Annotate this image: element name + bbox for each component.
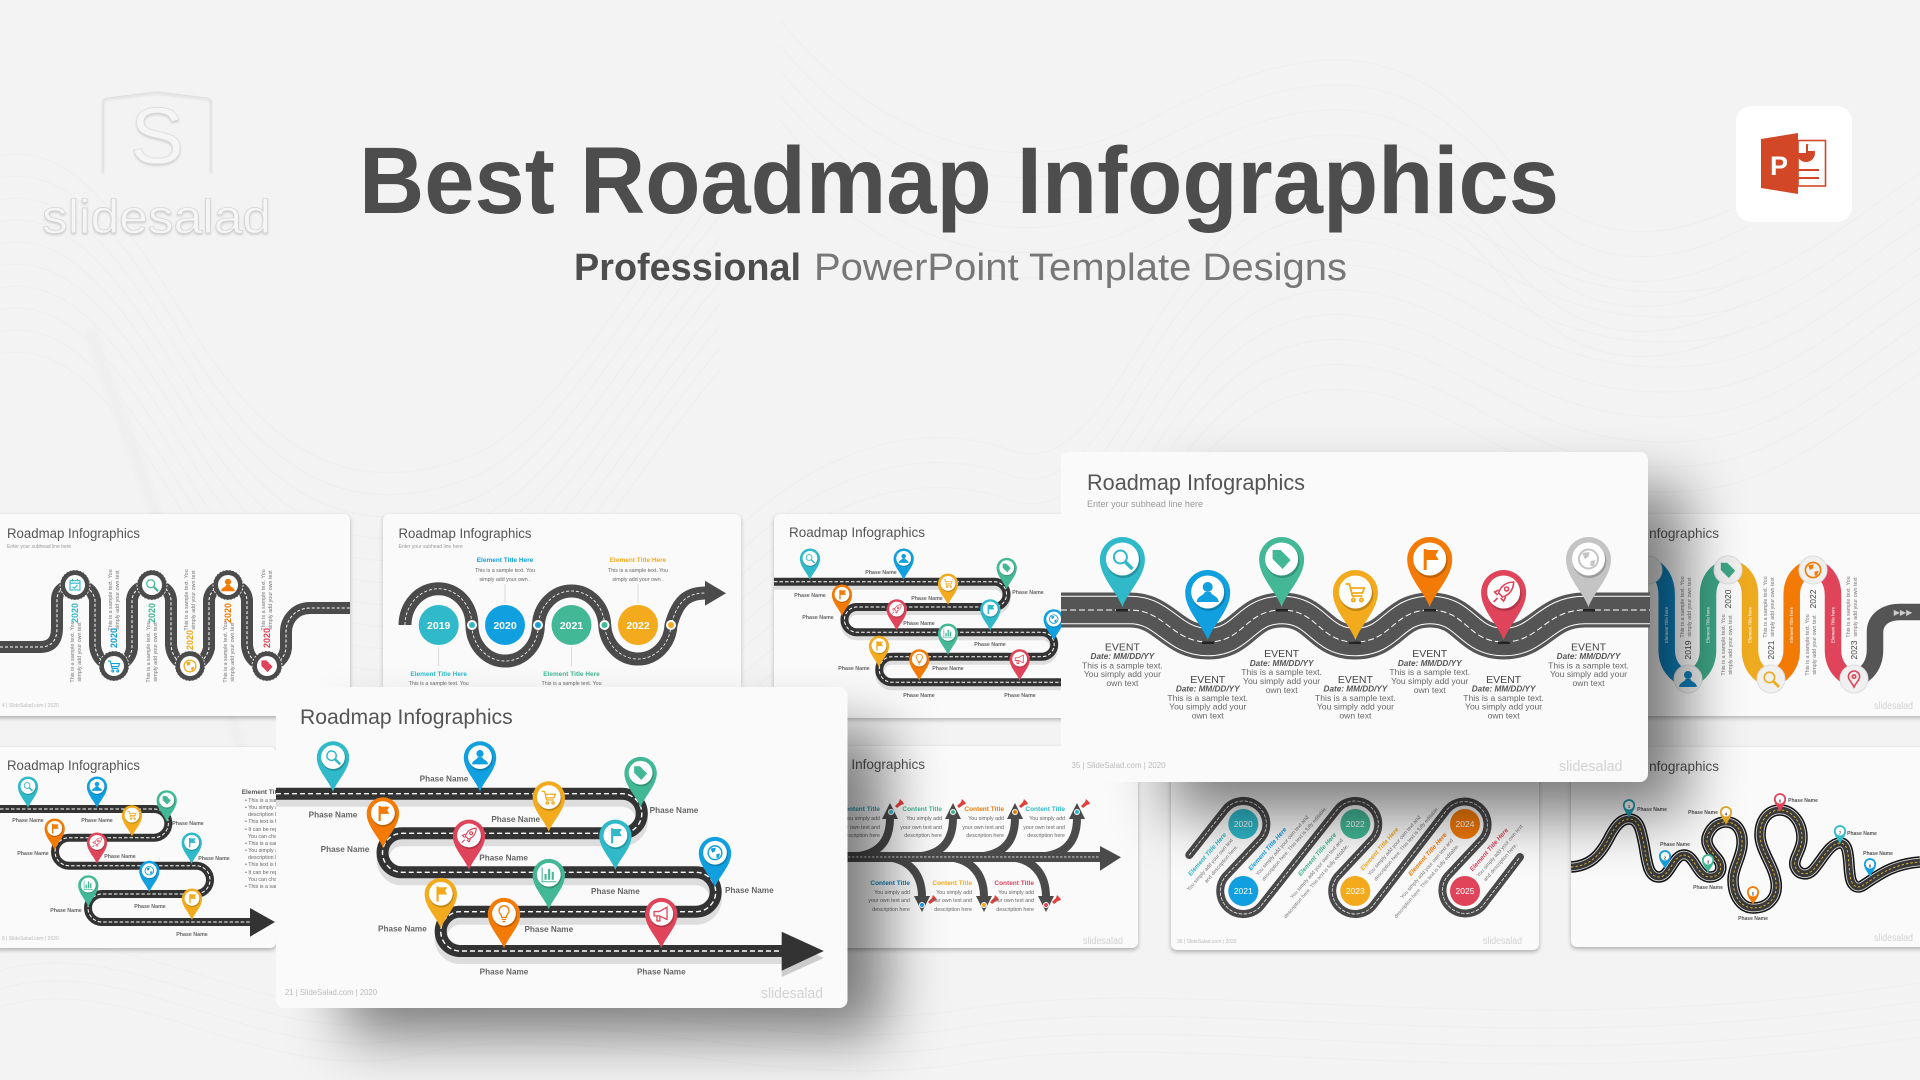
event text 5: You simply add your <box>1391 676 1468 686</box>
panel: slide G diagonal road: description here. This text is fully editable. <box>1283 843 1351 920</box>
panel: slide F fishbone road: Content Title <box>1025 806 1065 813</box>
panel: slide F fishbone road: Roadmap Infographics <box>789 757 925 772</box>
panel: slide D ribbon road with years: simply add your own text <box>1728 615 1734 675</box>
panel: slide G diagonal road: You simply add your own text and <box>1255 815 1310 877</box>
panel: slide E stacked road with arrow: Phase Name <box>176 932 208 938</box>
panel: slide F fishbone road: You simply add <box>998 890 1034 896</box>
panel: slide H winding road with numbered pins: Phase Name <box>1660 842 1690 848</box>
pin: cart <box>1333 570 1378 640</box>
panel: slide A vertical zigzag road: Enter your subhead line here <box>7 544 71 550</box>
panel: slide E stacked road with arrow: • You simply add <box>245 805 284 811</box>
event text 7: Date: MM/DD/YY <box>1557 652 1622 661</box>
event text 4: This is a sample text. <box>1315 693 1396 703</box>
pin: orange flag <box>367 797 399 848</box>
panel: slide D ribbon road with years: 2022 <box>1808 589 1818 608</box>
panel: slide F fishbone road: You simply add <box>906 816 942 822</box>
panel: slide H winding road with numbered pins: 6 <box>1779 798 1782 804</box>
panel: slide A vertical zigzag road: simply add your own text <box>191 570 197 630</box>
panel: slide H winding road with numbered pins: Phase Name <box>1637 807 1667 813</box>
panel: slide G diagonal road: 2020 <box>1234 819 1253 829</box>
panel: slide G diagonal road: You simply add your own text and <box>1367 815 1422 877</box>
panel: slide F fishbone road: You simply add <box>968 816 1004 822</box>
panel: slide D ribbon road with years: This is a sample text. You <box>1805 614 1811 676</box>
panel: slide A vertical zigzag road: 2020 <box>262 628 272 648</box>
event text 1: Date: MM/DD/YY <box>1091 652 1156 661</box>
event text 2: EVENT <box>1190 674 1226 686</box>
pin: chart <box>533 859 565 909</box>
panel: slide A vertical zigzag road: 2020 <box>185 630 195 650</box>
panel: slide F fishbone road: description here <box>966 833 1004 839</box>
panel: slide F fishbone road: description here <box>872 907 910 913</box>
event text 2: You simply add your <box>1169 702 1246 712</box>
event text 5: EVENT <box>1412 648 1448 660</box>
panel: slide H winding road with numbered pins: 8 <box>1869 864 1872 868</box>
event text 3: You simply add your <box>1243 676 1320 686</box>
pin: rocket <box>1481 570 1526 640</box>
panel: slide F fishbone road: You simply add <box>844 816 880 822</box>
panel: slide F fishbone road: your own text and <box>838 825 880 831</box>
pin: bulb <box>488 898 520 948</box>
slide watermark: slidesalad <box>1559 758 1622 775</box>
panel: slide D ribbon road with years: ▶▶▶ <box>1894 608 1913 617</box>
panel: slide D ribbon road with years: This is a sample text. You <box>1846 576 1852 638</box>
logo: embossed slidesalad: slidesalad <box>42 190 271 243</box>
pin: yellow flag <box>425 878 457 928</box>
panel: slide B sine-wave road with year circles: simply add your own . <box>612 577 664 583</box>
pin: search <box>317 741 349 792</box>
panel: slide B sine-wave road with year circles: This is a sample text. You <box>608 568 668 574</box>
event text 1: EVENT <box>1105 642 1140 654</box>
panel: slide F fishbone road: description here <box>996 907 1034 913</box>
phase labels: Phase Name <box>637 968 686 976</box>
panel: slide B sine-wave road with year circles: Element Title Here <box>477 557 534 564</box>
panel: slide E stacked road with arrow: Element Title <box>242 789 282 796</box>
event text 1: own text <box>1106 678 1139 688</box>
event text 3 <box>1241 648 1322 695</box>
panel: slide E stacked road with arrow: description here <box>248 812 286 818</box>
panel: slide G diagonal road: Element Title Here <box>1469 827 1510 873</box>
panel: slide H winding road with numbered pins: 7 <box>1839 830 1842 836</box>
panel: slide A vertical zigzag road: Roadmap Infographics <box>7 526 140 541</box>
panel: slide A vertical zigzag road: This is a sample text. You <box>70 621 76 683</box>
panel: featured slide, stacked road with phase pins <box>276 687 848 1008</box>
panel: slide B sine-wave road with year circles: Roadmap Infographics <box>398 526 532 541</box>
panel: slide F fishbone road: Content Title <box>994 880 1034 887</box>
panel: slide B sine-wave road with year circles: Element Title Here <box>543 671 600 678</box>
panel: slide C stacked road with pins: Phase Name <box>903 693 935 699</box>
event text 4: EVENT <box>1338 674 1373 686</box>
phase labels: Phase Name <box>321 845 370 854</box>
slide watermark: slidesalad <box>761 985 823 1002</box>
panel: slide H winding road with numbered pins: Phase Name <box>1693 885 1723 891</box>
event text 2: own text <box>1192 710 1224 720</box>
panel: slide G diagonal road: You simply add your own text and <box>1289 838 1345 900</box>
panel: slide G diagonal road: You simply add your own text <box>1476 824 1525 879</box>
panel: slide A vertical zigzag road: simply add your own text <box>77 622 83 682</box>
phase labels: Phase Name <box>480 968 529 976</box>
subtitle <box>574 247 1347 289</box>
panel: slide D ribbon road with years: simply add your own text <box>1687 577 1693 637</box>
panel: slide G diagonal road: You simply add your own text and <box>1400 838 1455 900</box>
slide footer: 35 | SlideSalad.com | 2020 <box>1072 760 1166 770</box>
panel: slide E stacked road with arrow: • This text is fully <box>245 819 285 825</box>
panel: slide F fishbone road: You simply add <box>1029 816 1065 822</box>
panel: slide G diagonal road: Element Title Here <box>1407 831 1449 878</box>
panel: slide B sine-wave road with year circles: Enter your subhead line here <box>398 544 463 550</box>
panel: slide E stacked road with arrow: Roadmap Infographics <box>7 758 140 773</box>
panel: slide E stacked road with arrow: 8 | SlideSalad.com | 2020 <box>2 936 59 942</box>
panel: slide A vertical zigzag road <box>0 514 350 718</box>
panel: slide B sine-wave road with year circles: 2021 <box>560 620 583 632</box>
panel: slide C stacked road with pins: Phase Name <box>974 642 1006 648</box>
panel: slide C stacked road with pins <box>774 514 1074 720</box>
slide heading: Roadmap Infographics <box>300 705 513 729</box>
slide heading: Roadmap Infographics <box>1087 470 1305 495</box>
panel: slide G diagonal road: 2023 <box>1346 886 1365 896</box>
panel: slide D ribbon road with years: This is a sample text. You <box>1721 614 1727 676</box>
panel: slide F fishbone road: Content Title <box>964 806 1004 813</box>
panel: slide A vertical zigzag road: This is a sample text. You <box>146 621 152 683</box>
panel: slide A vertical zigzag road: 4 | SlideSalad.com | 2020 <box>2 703 59 709</box>
panel: slide F fishbone road: slidesalad <box>1083 936 1123 947</box>
event text 5: own text <box>1414 685 1446 695</box>
panel: slide G diagonal road: Element Title Here <box>1247 826 1289 872</box>
event text 7: This is a sample text. <box>1548 660 1629 670</box>
panel: slide C stacked road with pins: Phase Name <box>1012 590 1044 596</box>
panel: slide H winding road with numbered pins: Phase Name <box>1847 831 1877 837</box>
panel: slide G diagonal road: Element Title Here <box>1359 826 1401 872</box>
event text 5: This is a sample text. <box>1389 667 1470 677</box>
panel: slide F fishbone road: description here <box>934 907 972 913</box>
event text 4: own text <box>1339 710 1372 720</box>
event text 4: You simply add your <box>1317 702 1394 712</box>
panel: slide E stacked road with arrow: You can change <box>248 877 286 883</box>
panel: slide G diagonal road: Element Title Here <box>1187 831 1229 878</box>
panel: slide B sine-wave road with year circles <box>383 514 741 718</box>
panel: slide E stacked road with arrow: Phase Name <box>134 904 166 910</box>
panel: slide H winding road with numbered pins: Phase Name <box>1688 810 1718 816</box>
logo: embossed slidesalad: S <box>130 91 184 180</box>
panel: slide F fishbone road: You simply add <box>936 890 972 896</box>
panel: slide H winding road with numbered pins: 5 <box>1752 892 1755 896</box>
event text 5 <box>1389 648 1470 695</box>
event text 6 <box>1463 674 1544 720</box>
shadow of the featured top slide <box>1170 490 1685 815</box>
panel: slide A vertical zigzag road: This is a sample text. You <box>184 569 190 631</box>
panel: slide E stacked road with arrow: • It can be replaced <box>245 827 290 833</box>
panel: slide E stacked road with arrow: • It can be replaced <box>245 870 290 876</box>
pin: megaphone <box>645 898 678 948</box>
phase labels: Phase Name <box>725 886 774 895</box>
panel: slide A vertical zigzag road: 2020 <box>109 628 119 648</box>
phase labels: Phase Name <box>378 924 427 934</box>
panel: slide E stacked road with arrow: Phase Name <box>198 856 230 862</box>
panel: slide D ribbon road with years: This is a sample text. You <box>1763 576 1769 638</box>
panel: slide H winding road with numbered pins: 1 <box>1628 804 1631 809</box>
pin: search <box>1100 537 1145 607</box>
panel: slide G diagonal road: You simply add your own text <box>1186 837 1235 893</box>
panel: slide D ribbon road with years: simply add your own text <box>1853 577 1859 637</box>
title: Best Roadmap Infographics <box>359 128 1559 234</box>
panel: slide D ribbon road with years: Element Title here <box>1748 606 1752 643</box>
event text 2: Date: MM/DD/YY <box>1176 684 1241 694</box>
panel: slide D ribbon road with years: This is a sample text. You <box>1680 576 1686 638</box>
panel: slide G diagonal road: 2025 <box>1456 886 1475 896</box>
panel: slide G diagonal road: 2022 <box>1346 819 1365 829</box>
pin: flag <box>1407 537 1452 607</box>
panel: slide G diagonal road: 2024 <box>1456 819 1475 829</box>
panel: slide B sine-wave road with year circles: Element Title Here <box>610 557 667 564</box>
phase labels: Phase Name <box>420 774 469 784</box>
panel: slide G diagonal road: description here. This text is fully editable. <box>1261 806 1329 882</box>
panel: slide F fishbone road: your own text and <box>992 898 1034 904</box>
phase labels: Phase Name <box>524 925 574 934</box>
panel: slide E stacked road with arrow: Phase Name <box>50 908 82 914</box>
panel: slide D ribbon road with years: simply add your own text <box>1812 615 1818 675</box>
panel: slide A vertical zigzag road: simply add your own text <box>153 622 159 682</box>
panel: slide E stacked road with arrow: description here <box>248 855 286 861</box>
panel: slide H winding road with numbered pins: Phase Name <box>1738 916 1768 922</box>
panel: slide H winding road with numbered pins: 2 <box>1664 856 1667 860</box>
panel: slide B sine-wave road with year circles: 2019 <box>427 620 451 632</box>
pin: teal flag <box>599 820 632 870</box>
event text 6: EVENT <box>1486 674 1522 686</box>
event text 6: This is a sample text. <box>1463 693 1544 703</box>
panel: slide B sine-wave road with year circles: This is a sample text. You <box>409 681 469 687</box>
pin: person <box>1185 570 1230 640</box>
panel: slide F fishbone road: description here <box>1027 833 1065 839</box>
event text 7: own text <box>1572 678 1605 688</box>
pin: tag <box>1259 537 1304 607</box>
event text 5: Date: MM/DD/YY <box>1398 659 1463 668</box>
panel: slide B sine-wave road with year circles: This is a sample text. You <box>541 681 602 687</box>
phase labels <box>309 774 774 976</box>
panel: slide H winding road with numbered pins: 3 <box>1707 860 1710 864</box>
panel: slide C stacked road with pins: Phase Name <box>903 621 935 627</box>
panel: slide A vertical zigzag road: 2020 <box>223 603 233 623</box>
panel: slide A vertical zigzag road: 2020 <box>147 603 157 623</box>
event text 7: EVENT <box>1571 642 1607 654</box>
panel: slide F fishbone road <box>780 746 1138 950</box>
slide footer: 21 | SlideSalad.com | 2020 <box>285 987 377 997</box>
panel: slide D ribbon road with years: slidesalad <box>1874 701 1913 712</box>
panel: slide H winding road with numbered pins: Phase Name <box>1863 851 1893 857</box>
phase labels: Phase Name <box>591 887 640 896</box>
panel: slide G diagonal road: and description here. <box>1204 844 1240 885</box>
panel: slide F fishbone road: You simply add <box>874 890 910 896</box>
logo: embossed slidesalad <box>42 91 271 243</box>
panel: slide C stacked road with pins: Roadmap Infographics <box>789 525 925 540</box>
pin: tag <box>624 757 657 807</box>
panel: slide F fishbone road: your own text and <box>1023 825 1065 831</box>
panel: slide A vertical zigzag road: This is a sample text. You <box>108 569 114 631</box>
panel: slide H winding road with numbered pins <box>1571 747 1920 949</box>
event text 1: You simply add your <box>1084 669 1161 679</box>
panel: slide F fishbone road: your own text and <box>868 898 910 904</box>
event text 6: Date: MM/DD/YY <box>1472 684 1537 694</box>
pin: cart <box>533 781 565 832</box>
panel: slide G diagonal road: slidesalad <box>1483 936 1522 947</box>
panel: slide F fishbone road: Content Title <box>902 806 942 813</box>
panel: slide B sine-wave road with year circles: 2022 <box>626 620 650 632</box>
panel: slide G diagonal road: and description here. <box>1483 842 1519 883</box>
pin: person <box>464 741 496 792</box>
panel: slide D ribbon road with years: simply add your own text <box>1770 577 1776 637</box>
panel: slide B sine-wave road with year circles: This is a sample text. You <box>475 568 535 574</box>
pin: rocket <box>453 820 485 870</box>
panel: slide F fishbone road: Content Title <box>840 806 880 813</box>
panel: slide F fishbone road: your own text and <box>930 898 972 904</box>
panel: slide F fishbone road: your own text and <box>962 825 1004 831</box>
panel: slide A vertical zigzag road: simply add your own text <box>268 570 274 630</box>
panel: slide A vertical zigzag road: This is a sample text. You <box>261 569 267 631</box>
panel: slide E stacked road with arrow: • This is a sample <box>245 798 287 804</box>
panel: slide D ribbon road with years: 2020 <box>1723 589 1733 608</box>
slide subhead: Enter your subhead line here <box>1087 499 1203 510</box>
event text 2: This is a sample text. <box>1167 693 1248 703</box>
phase labels: Phase Name <box>309 810 358 820</box>
event text 1: This is a sample text. <box>1082 660 1163 670</box>
panel: slide G diagonal road: description here. This text is fully editable. <box>1373 806 1441 882</box>
road: wavy highway <box>1061 610 1650 642</box>
panel: slide H winding road with numbered pins: Roadmap Infographics <box>1583 759 1719 774</box>
panel: slide C stacked road with pins: Phase Name <box>932 666 964 672</box>
panel: slide H winding road with numbered pins: 4 <box>1725 812 1728 816</box>
panel: slide A vertical zigzag road: simply add your own text <box>230 622 236 682</box>
road: stacked switchbacks with arrow <box>276 794 824 977</box>
event text 6: You simply add your <box>1465 702 1542 712</box>
event text 6: own text <box>1488 710 1520 720</box>
event text 3: This is a sample text. <box>1241 667 1322 677</box>
panel: slide E stacked road with arrow: • This is a sample <box>245 841 287 847</box>
panel: slide E stacked road with arrow <box>0 747 290 950</box>
panel: slide F fishbone road: description here <box>842 833 880 839</box>
panel: slide F fishbone road: your own text and <box>900 825 942 831</box>
panel: slide D ribbon road with years: Element Title here <box>1830 606 1836 643</box>
panel: slide E stacked road with arrow: Phase Name <box>17 851 49 857</box>
pin: globe <box>699 837 731 887</box>
subtitle: Professional <box>574 247 801 289</box>
panel: slide E stacked road with arrow: Phase Name <box>172 821 204 827</box>
panel: slide E stacked road with arrow: • This is a sample <box>245 884 287 890</box>
event text 7 <box>1548 642 1629 688</box>
panel: slide C stacked road with pins: Phase Name <box>802 615 834 621</box>
panel: slide F fishbone road: Content Title <box>870 880 910 887</box>
subtitle: PowerPoint Template Designs <box>814 247 1347 289</box>
panel: slide C stacked road with pins: Phase Name <box>1004 693 1036 699</box>
panel: slide G diagonal road: description here. This text is fully editable. <box>1393 843 1461 920</box>
panel: slide H winding road with numbered pins: slidesalad <box>1874 933 1913 944</box>
panel: slide C stacked road with pins: Phase Name <box>865 570 897 576</box>
icon: PowerPoint badge: P <box>1770 151 1788 181</box>
panel: slide D ribbon road with years: 2019 <box>1683 640 1693 659</box>
event text 4 <box>1315 674 1396 720</box>
panel: slide G diagonal road: Element Title Here <box>1297 831 1339 878</box>
panel: slide D ribbon road with years: 2021 <box>1766 640 1776 659</box>
panel: slide C stacked road with pins: Phase Name <box>838 666 870 672</box>
pin: globe <box>1566 537 1611 607</box>
panel: slide D ribbon road with years: Element Title here <box>1664 606 1669 643</box>
icon: PowerPoint badge <box>1736 106 1852 222</box>
panel: slide D ribbon road with years: Roadmap Infographics <box>1583 526 1719 541</box>
panel: slide E stacked road with arrow: • You simply add <box>245 848 284 854</box>
event text 2 <box>1167 674 1248 720</box>
panel: slide G diagonal road: 36 | SlideSalad.com | 2020 <box>1177 939 1237 945</box>
panel: slide C stacked road with pins: Phase Name <box>911 596 943 602</box>
panel: slide H winding road with numbered pins: Phase Name <box>1788 798 1818 804</box>
panel: slide F fishbone road: Content Title <box>932 880 972 887</box>
panel: slide B sine-wave road with year circles: Element Title Here <box>410 671 467 678</box>
panel: slide E stacked road with arrow: You can change <box>248 834 286 840</box>
event text 7: You simply add your <box>1550 669 1627 679</box>
panel: featured slide, curvy road with event pins <box>1061 452 1650 782</box>
panel: slide E stacked road with arrow: • This text is fully <box>245 862 285 868</box>
panel: slide B sine-wave road with year circles: 2020 <box>493 620 517 632</box>
panel: slide D ribbon road with years <box>1560 514 1920 718</box>
event text 4: Date: MM/DD/YY <box>1324 684 1389 694</box>
shadow of the featured bottom slide <box>345 730 885 1035</box>
panel: slide D ribbon road with years: 2023 <box>1849 640 1859 659</box>
event text 3: EVENT <box>1264 648 1300 660</box>
panel: slide G diagonal road: 2021 <box>1234 886 1253 896</box>
panel: slide E stacked road with arrow: Phase Name <box>12 818 44 824</box>
panel: slide B sine-wave road with year circles: simply add your own . <box>479 577 531 583</box>
panel: slide C stacked road with pins: Phase Name <box>794 593 826 599</box>
panel: slide D ribbon road with years: Element Title here <box>1706 606 1710 643</box>
phase labels: Phase Name <box>491 815 540 824</box>
panel: slide A vertical zigzag road: simply add your own text <box>115 570 121 630</box>
event text 3: own text <box>1266 685 1298 695</box>
panel: slide F fishbone road: description here <box>904 833 942 839</box>
phase labels: Phase Name <box>479 854 528 863</box>
panel: slide D ribbon road with years: Element Title here <box>1789 606 1794 643</box>
panel: slide E stacked road with arrow: Phase Name <box>104 854 136 860</box>
panel: slide E stacked road with arrow: Phase Name <box>81 818 113 824</box>
event text 3: Date: MM/DD/YY <box>1250 659 1315 668</box>
panel: slide A vertical zigzag road: 2020 <box>70 603 80 623</box>
phase labels: Phase Name <box>650 806 699 815</box>
panel: slide A vertical zigzag road: This is a sample text. You <box>223 621 229 683</box>
panel: slide G diagonal road <box>1171 750 1539 952</box>
event text 1 <box>1082 642 1163 688</box>
